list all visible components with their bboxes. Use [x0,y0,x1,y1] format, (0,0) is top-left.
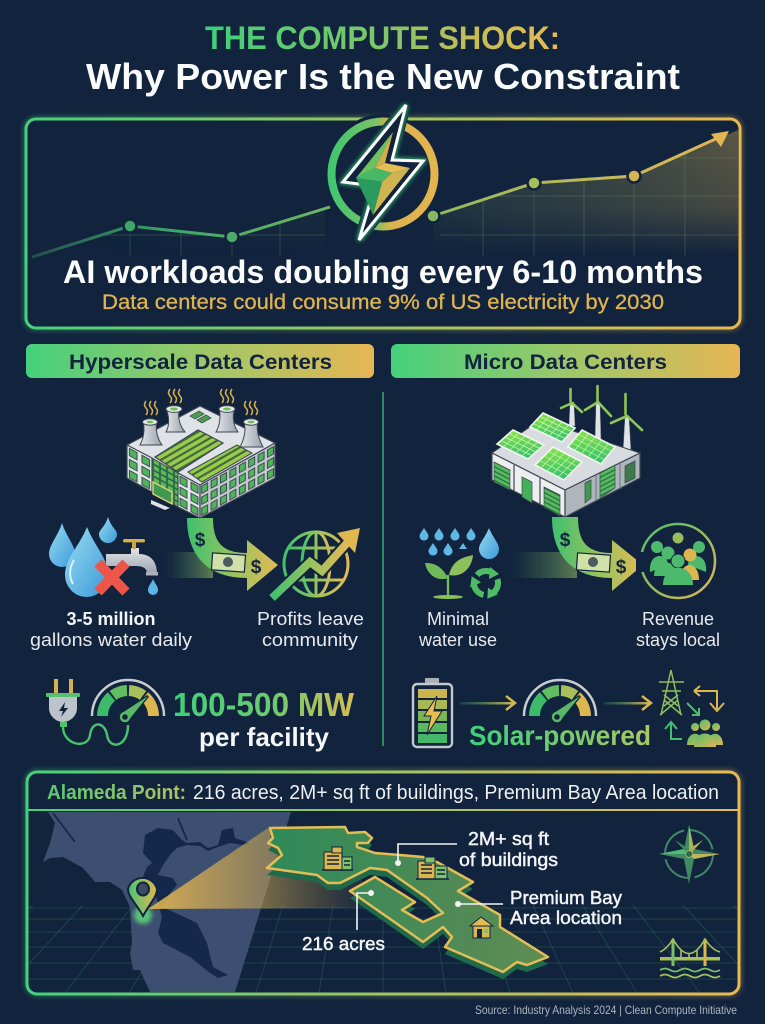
revenue label [636,609,720,650]
icon: efficiency gauge [524,680,596,721]
arrow: battery to gauge [460,696,515,710]
icon: rain drops, seedling, recycling [420,528,504,602]
flow arrow: revenue stays local [510,517,643,591]
map: San Francisco Bay [143,828,250,978]
minimal water label: Minimal [427,609,489,629]
power stat: per facility [199,722,330,752]
power stat: 100-500 MW [173,686,355,723]
icon: power plug and cord [46,679,128,745]
panel header [27,773,739,811]
hero subheading: Data centers could consume 9% of US electricity by 2030 [102,291,664,314]
map: Alameda Point site [267,827,548,979]
icon: solar micro data center with wind turbines [492,386,642,517]
icon: lightning bolt in ring [325,105,441,240]
callout: buildings [395,829,558,870]
hero headline: AI workloads doubling every 6-10 months [63,254,703,290]
water use label: gallons water daily [30,630,192,650]
title [86,20,680,97]
map: Tomales inlet and creek [53,813,187,842]
minimal water label [418,609,497,650]
minimal water label: water use [418,630,497,650]
icon: second office building [416,857,449,879]
highlight beam [148,828,362,909]
map pin [128,878,157,924]
callout: premium location: Premium Bay [510,888,622,908]
icon: bridge over water [660,939,720,978]
map: Bay Area land [43,812,291,992]
water use label [30,609,192,650]
flow arrow: profits leaving [165,518,278,591]
heading: Hyperscale Data Centers [26,344,374,378]
icon: water drops with red cross and faucet [49,517,158,597]
icon: office building [322,847,353,870]
callout: acreage: 216 acres [302,934,385,954]
flow arrow: revenue stays local: $ [560,530,571,551]
chart: rising power demand [30,130,738,257]
column divider [382,392,384,746]
panel header: Alameda Point: [47,782,186,804]
icon: community in circle [636,524,715,598]
callout: premium location: Area location [510,908,622,928]
water use label: 3-5 million [66,609,156,629]
icon: large data center building [127,389,275,518]
flow arrow: profits leaving: $ [195,530,206,551]
heading: Micro Data Centers [391,344,740,378]
solar-powered label: Solar-powered [469,720,651,751]
arrow: gauge to grid [604,696,651,710]
heading: Hyperscale Data Centers: Hyperscale Data Centers [69,351,332,374]
power stat [173,686,355,752]
profits label [257,609,364,650]
revenue label: Revenue [642,609,714,629]
callout: premium location [455,888,622,928]
steam [144,389,258,415]
panel: AI workload hero [26,105,740,328]
flow arrow: revenue stays local: $ [616,557,627,578]
revenue label: stays local [636,630,720,650]
panel header: 216 acres, 2M+ sq ft of buildings, Premium Bay Area location [193,782,719,804]
icon: power gauge [92,680,164,721]
icon: compass rose [659,825,720,884]
map grid [0,905,765,993]
icon: battery [413,678,452,747]
panel: Alameda Point map [0,772,765,994]
icon: house [470,917,493,938]
callout: buildings: 2M+ sq ft [468,829,549,849]
icon: globe with rising arrow [272,528,360,598]
profits label: Profits leave [257,609,364,629]
callout: acreage [302,890,385,954]
callout: buildings: of buildings [459,850,558,870]
icon: transmission tower and exchange arrows [659,670,724,747]
heading: Micro Data Centers: Micro Data Centers [464,351,667,374]
title line two: Why Power Is the New Constraint [86,56,680,97]
title line one: THE COMPUTE SHOCK: [205,20,560,56]
panel: hyperscale column [30,389,364,752]
profits label: community [262,630,358,650]
flow arrow: profits leaving: $ [251,557,262,578]
panel: micro column [413,386,724,751]
